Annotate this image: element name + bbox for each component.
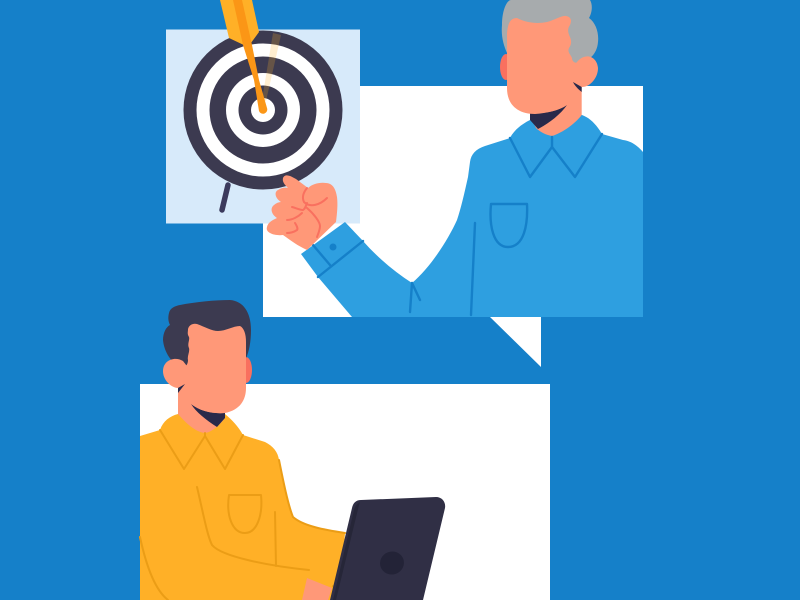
sleeve edge <box>332 586 338 588</box>
person: man with tablet <box>140 300 445 600</box>
hand <box>267 175 337 250</box>
shirt: blue <box>301 115 643 317</box>
face <box>183 324 246 413</box>
speech bubble: top <box>263 86 643 367</box>
shirt: yellow <box>140 414 345 600</box>
finger lines <box>287 188 327 237</box>
ear <box>163 359 190 388</box>
shirt details <box>140 430 345 600</box>
face <box>507 16 579 114</box>
icon: dart <box>220 0 267 114</box>
tablet <box>330 497 445 600</box>
shirt details <box>313 134 602 315</box>
ear: far side <box>500 54 512 80</box>
hand <box>302 578 332 600</box>
person: older man <box>301 0 643 317</box>
speech bubble: bottom <box>140 384 550 600</box>
neck shadow <box>191 404 225 427</box>
hair: grey <box>502 0 598 63</box>
tablet camera <box>377 548 407 578</box>
ear: far side <box>240 357 252 383</box>
icon: target <box>184 30 342 210</box>
cuff button <box>330 244 336 250</box>
hair: dark <box>163 300 251 368</box>
neck <box>178 372 225 433</box>
neck <box>530 60 582 136</box>
ear shadow <box>573 82 582 92</box>
neck shadow <box>530 105 567 129</box>
ear shadow <box>178 384 185 393</box>
ear <box>570 56 598 87</box>
panel: target card <box>166 30 360 224</box>
